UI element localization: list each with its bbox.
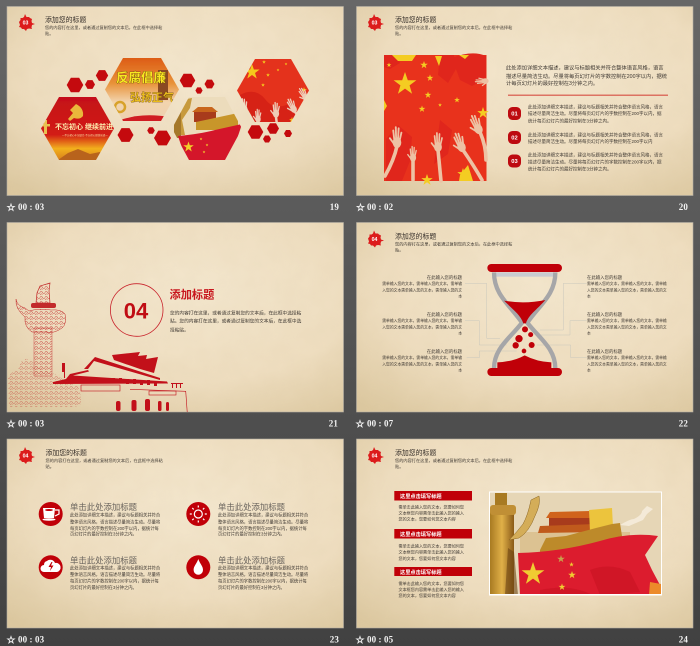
intro paragraph — [506, 64, 668, 87]
list item 1 — [394, 491, 472, 521]
hexagon photo: party emblem — [41, 97, 114, 160]
intro paragraph: 计每页幻灯片的最好控制在3分钟之内。 — [506, 79, 598, 87]
slide 21 footer: 21 — [329, 418, 338, 428]
slide 20 footer — [357, 202, 688, 212]
left callout 2: 本 — [458, 330, 462, 336]
right callout 2: 入您的文本需单输入您的文本，需单输入您的文 — [587, 324, 667, 330]
left callout 2 — [382, 311, 463, 336]
illustration: huabiao column — [8, 283, 81, 407]
item 01 — [508, 104, 663, 124]
slide 23 header: 添加您的标题 — [46, 448, 87, 457]
hexagon photo: flag and raised hands — [237, 59, 310, 125]
right callout 2: 需单输入您的文本，需单输入您的文本，需单输 — [587, 318, 667, 323]
slide 23 header: 贴。 — [46, 463, 54, 470]
right callout 3: 需单输入您的文本，需单输入您的文本，需单输 — [587, 355, 667, 360]
item 01: 此处添加详细文本描述，建议与标题相关并符合整体语言风格，语言 — [528, 104, 663, 111]
slide 23 footer: 23 — [330, 634, 339, 644]
item: cloud icon with text: 页幻灯片的最好控制在3分钟之内。 — [70, 584, 137, 591]
section heading: 添加标题 — [170, 288, 214, 302]
hexagon photo: tiananmen and flag — [172, 97, 242, 160]
item: drop icon with text: 单击此处添加标题 — [218, 556, 286, 566]
slide 19 header — [19, 14, 162, 37]
slide 20: flag photo with numbered text — [356, 6, 693, 212]
section description — [170, 310, 302, 334]
slide 24 header: 您的内容打在这里，或者通过复制您的文本后，在此框中选择粘 — [395, 457, 512, 464]
slide 22 header: 04 — [372, 237, 377, 243]
slide 19 paper panel — [7, 6, 344, 196]
slide 20 header — [368, 14, 512, 37]
right callout 3 — [587, 348, 667, 372]
slide 20 header: 03 — [372, 20, 377, 26]
slide 24 footer — [357, 634, 688, 644]
intro paragraph: 此处添加详细文本描述，建议与标题相关并符合整体语言风格，语言 — [506, 64, 664, 72]
slide 22 header: 贴。 — [395, 246, 403, 254]
left callout 1: 在此输入您的标题 — [427, 274, 463, 281]
item 02: 02 — [511, 136, 518, 142]
list item 2: 文本框您内容需单击此输入您的输入 — [398, 548, 464, 554]
slide 21 footer — [8, 418, 338, 428]
hourglass — [487, 264, 562, 376]
slide 22 paper panel — [356, 222, 693, 412]
right callout 1: 入您的文本需单输入您的文本，需单输入您的文 — [587, 288, 667, 292]
item: sun icon with text: 页幻灯片的最好控制在3分钟之内。 — [218, 531, 285, 538]
slide 19 header: 添加您的标题 — [45, 15, 86, 24]
slide 20 header: 贴。 — [395, 30, 403, 37]
slide 24: titled list with photo — [356, 439, 693, 644]
item 01: 描述尽量简洁生动。尽量将每页幻灯片的字数控制在200字以内，据 — [528, 110, 662, 117]
slide 24 paper panel — [356, 439, 693, 628]
item 02: 此处添加详细文本描述，建议与标题相关并符合整体语言风格，语言 — [528, 131, 663, 138]
left callout 2: 需单输入您的文本，需单输入您的文本，需单输 — [382, 318, 462, 323]
list item 2 — [394, 529, 472, 561]
connector lines — [465, 283, 587, 358]
slide 19 footer — [8, 202, 339, 212]
section description: 您的内容打在这里，或者通过复制您的文本后，在此框中选择粘 — [170, 310, 302, 317]
red divider line — [508, 94, 668, 97]
slide 20 header: 添加您的标题 — [395, 15, 436, 24]
list item 2: 这里点击填写标题 — [400, 530, 442, 538]
slide 19: hexagon photo collage — [7, 6, 344, 212]
right callout 2 — [587, 311, 667, 336]
slide 19 header: 03 — [23, 20, 28, 26]
slide 24 footer: 00 : 05 — [367, 634, 394, 644]
item 03: 此处添加详细文本描述，建议与标题相关并符合整体语言风格，语言 — [528, 152, 663, 159]
item 03 — [508, 152, 663, 172]
photo: column, gate and flag — [489, 492, 662, 596]
left callout 3 — [382, 348, 463, 372]
list item 1: 文本框您内容需单击此输入您的输入 — [398, 509, 464, 515]
slide 22 footer — [357, 418, 688, 428]
slide 20 header: 您的内容打在这里，或者通过复制您的文本后，在此框中选择粘 — [395, 24, 512, 31]
item: cup icon with text: 单击此处添加标题 — [70, 502, 138, 512]
item: drop icon with text: 此处添加详细文本描述，建议与标题相关并符合 — [218, 565, 309, 572]
hexagon photo: anti-corruption poster: 弘扬正气 — [130, 90, 174, 104]
hexagon photo: anti-corruption poster — [105, 58, 179, 121]
item: sun icon with text: 此处添加详细文本描述，建议与标题相关并符合 — [218, 512, 309, 519]
item: sun icon with text — [186, 502, 309, 538]
left callout 2: 入您的文本需单输入您的文本，需单输入您的文 — [382, 324, 462, 330]
right callout 3: 入您的文本需单输入您的文本，需单输入您的文 — [587, 362, 667, 366]
left callout 3: 入您的文本需单输入您的文本，需单输入您的文 — [382, 362, 462, 366]
slide 23: four icon items — [7, 439, 344, 644]
slide 21 footer: 00 : 03 — [18, 418, 45, 428]
illustration: tiananmen gate line art — [53, 352, 188, 412]
left callout 3: 需单输入您的文本，需单输入您的文本，需单输 — [382, 355, 462, 360]
slide 22: hourglass diagram — [356, 222, 693, 428]
item 03: 03 — [511, 159, 518, 165]
left callout 1 — [382, 274, 463, 298]
list item 3 — [394, 567, 472, 598]
slide 24 header: 添加您的标题 — [395, 448, 436, 457]
slide 23 header: 04 — [23, 454, 28, 460]
item: cup icon with text: 此处添加详细文本描述，建议与标题相关并符合 — [70, 512, 161, 519]
slide 22 footer: 22 — [679, 418, 688, 428]
item 01: 统计每页幻灯片的最好控制在3分钟之内。 — [528, 117, 612, 124]
section description: 择粘贴。 — [170, 327, 189, 334]
list item 2: 需单击此输入您的文本，您要如何您 — [398, 542, 464, 548]
list item 3: 需单击此输入您的文本，您要如何您 — [398, 580, 464, 586]
slide 23 footer: 00 : 03 — [18, 634, 45, 644]
small red hexagons — [67, 70, 292, 145]
item: cloud icon with text: 此处添加详细文本描述，建议与标题相关并符合 — [70, 565, 161, 572]
list item 3: 这里点击填写标题 — [400, 568, 442, 576]
right callout 3: 本 — [587, 368, 591, 372]
item: sun icon with text: 单击此处添加标题 — [218, 502, 286, 512]
right callout 3: 在此输入您的标题 — [587, 348, 623, 355]
hexagon photo: party emblem: 一不忘初心牢记使命 不忘初心继续前进一 — [62, 133, 108, 137]
right callout 1: 本 — [587, 294, 591, 298]
list item 1: 需单击此输入您的文本，您要如何您 — [398, 503, 464, 509]
slide 23 header — [19, 447, 163, 470]
hexagon photo: party emblem: 不忘初心 继续前进 — [55, 122, 113, 131]
item: cloud icon with text: 整体语言风格，语言描述尽量简洁生动。尽量将 — [70, 571, 161, 578]
right callout 2: 在此输入您的标题 — [587, 311, 623, 318]
slide 24 header: 贴。 — [395, 463, 403, 470]
item: sun icon with text: 整体语言风格，语言描述尽量简洁生动。尽量将 — [218, 518, 309, 525]
left callout 1: 需单输入您的文本，需单输入您的文本，需单输 — [382, 281, 462, 286]
left callout 1: 本 — [458, 294, 462, 298]
item 02 — [508, 131, 663, 145]
item: cloud icon with text: 单击此处添加标题 — [70, 556, 138, 566]
section number circle — [110, 284, 163, 336]
slide 21 paper panel — [7, 222, 344, 412]
slide 24 header — [368, 447, 512, 470]
slide 21: section divider 04 — [7, 222, 344, 428]
slide 23 footer — [8, 634, 339, 644]
left callout 3: 本 — [458, 368, 462, 372]
slide 22 header: 您的内容打在这里，或者通过复制您的文本后，在此框中选择粘 — [395, 240, 512, 248]
right callout 1 — [587, 274, 667, 298]
photo: flag of hearts and raised hands — [384, 53, 489, 185]
slide 23 paper panel — [7, 439, 344, 628]
slide 20 footer: 00 : 02 — [367, 202, 394, 212]
slide 19 header: 您的内容打在这里，或者通过复制您的文本后，在此框中选择粘 — [45, 24, 162, 31]
section number circle: 04 — [124, 298, 149, 324]
slide 23 header: 您的内容打在这里，或者通过复制您的文本后，在此框中选择粘 — [46, 457, 163, 464]
slide 20 paper panel — [356, 6, 693, 196]
item: sun icon with text: 每页幻灯片的字数控制在200字以内，据统计每 — [218, 525, 308, 532]
item 01: 01 — [511, 112, 518, 118]
section description: 贴。您的内容打在这里，或者通过复制您的文本后，在此框中选 — [170, 318, 302, 325]
slide 22 header: 添加您的标题 — [395, 232, 436, 240]
right callout 1: 需单输入您的文本，需单输入您的文本，需单输 — [587, 281, 667, 286]
item: cup icon with text: 整体语言风格，语言描述尽量简洁生动。尽量将 — [70, 518, 161, 525]
slide 24 header: 04 — [372, 454, 377, 460]
intro paragraph: 描述尽量简洁生动。尽量将每页幻灯片的字数控制在200字以内，据统 — [506, 72, 668, 80]
right callout 2: 本 — [587, 330, 591, 336]
item 03: 描述尽量简洁生动。尽量将每页幻灯片的字数控制在200字以内，据 — [528, 159, 662, 166]
item: cloud icon with text: 每页幻灯片的字数控制在200字以内，据统计每 — [70, 578, 160, 585]
item: cup icon with text: 每页幻灯片的字数控制在200字以内，据统计每 — [70, 525, 160, 532]
slide 20 footer: 20 — [679, 202, 688, 212]
slide 22 header — [368, 230, 512, 254]
right callout 1: 在此输入您的标题 — [587, 274, 623, 281]
slide 19 footer: 00 : 03 — [18, 202, 45, 212]
left callout 2: 在此输入您的标题 — [427, 311, 463, 318]
list item 3: 文本框您内容需单击此输入您的输入 — [398, 586, 464, 592]
item: cup icon with text: 页幻灯片的最好控制在3分钟之内。 — [70, 531, 137, 538]
item: drop icon with text: 页幻灯片的最好控制在3分钟之内。 — [218, 584, 285, 591]
item: drop icon with text — [186, 555, 309, 591]
list item 2: 您的文本，您要如何您文本内容 — [398, 555, 456, 561]
item 02: 描述尽量简洁生动。尽量将每页幻灯片的字数控制在200字以内 — [528, 138, 653, 145]
left callout 1: 入您的文本需单输入您的文本，需单输入您的文 — [382, 288, 462, 292]
item: cloud icon with text — [39, 555, 161, 591]
list item 3: 您的文本，您要如何您文本内容 — [398, 592, 456, 598]
item: cup icon with text — [39, 502, 161, 538]
hexagon photo: anti-corruption poster: 反腐倡廉 — [116, 70, 167, 85]
item: drop icon with text: 整体语言风格，语言描述尽量简洁生动。尽量将 — [218, 571, 309, 578]
list item 1: 这里点击填写标题 — [400, 492, 442, 500]
left callout 3: 在此输入您的标题 — [427, 348, 463, 355]
item: drop icon with text: 每页幻灯片的字数控制在200字以内，据统计每 — [218, 578, 308, 585]
slide 19 footer: 19 — [330, 202, 339, 212]
list item 1: 您的文本，您要如何您文本内容 — [398, 515, 456, 521]
slide 22 footer: 00 : 07 — [367, 418, 394, 428]
slide 19 header: 贴。 — [45, 30, 53, 37]
item 03: 统计每页幻灯片的最好控制在3分钟之内。 — [528, 165, 612, 172]
slide 24 footer: 24 — [679, 634, 688, 644]
